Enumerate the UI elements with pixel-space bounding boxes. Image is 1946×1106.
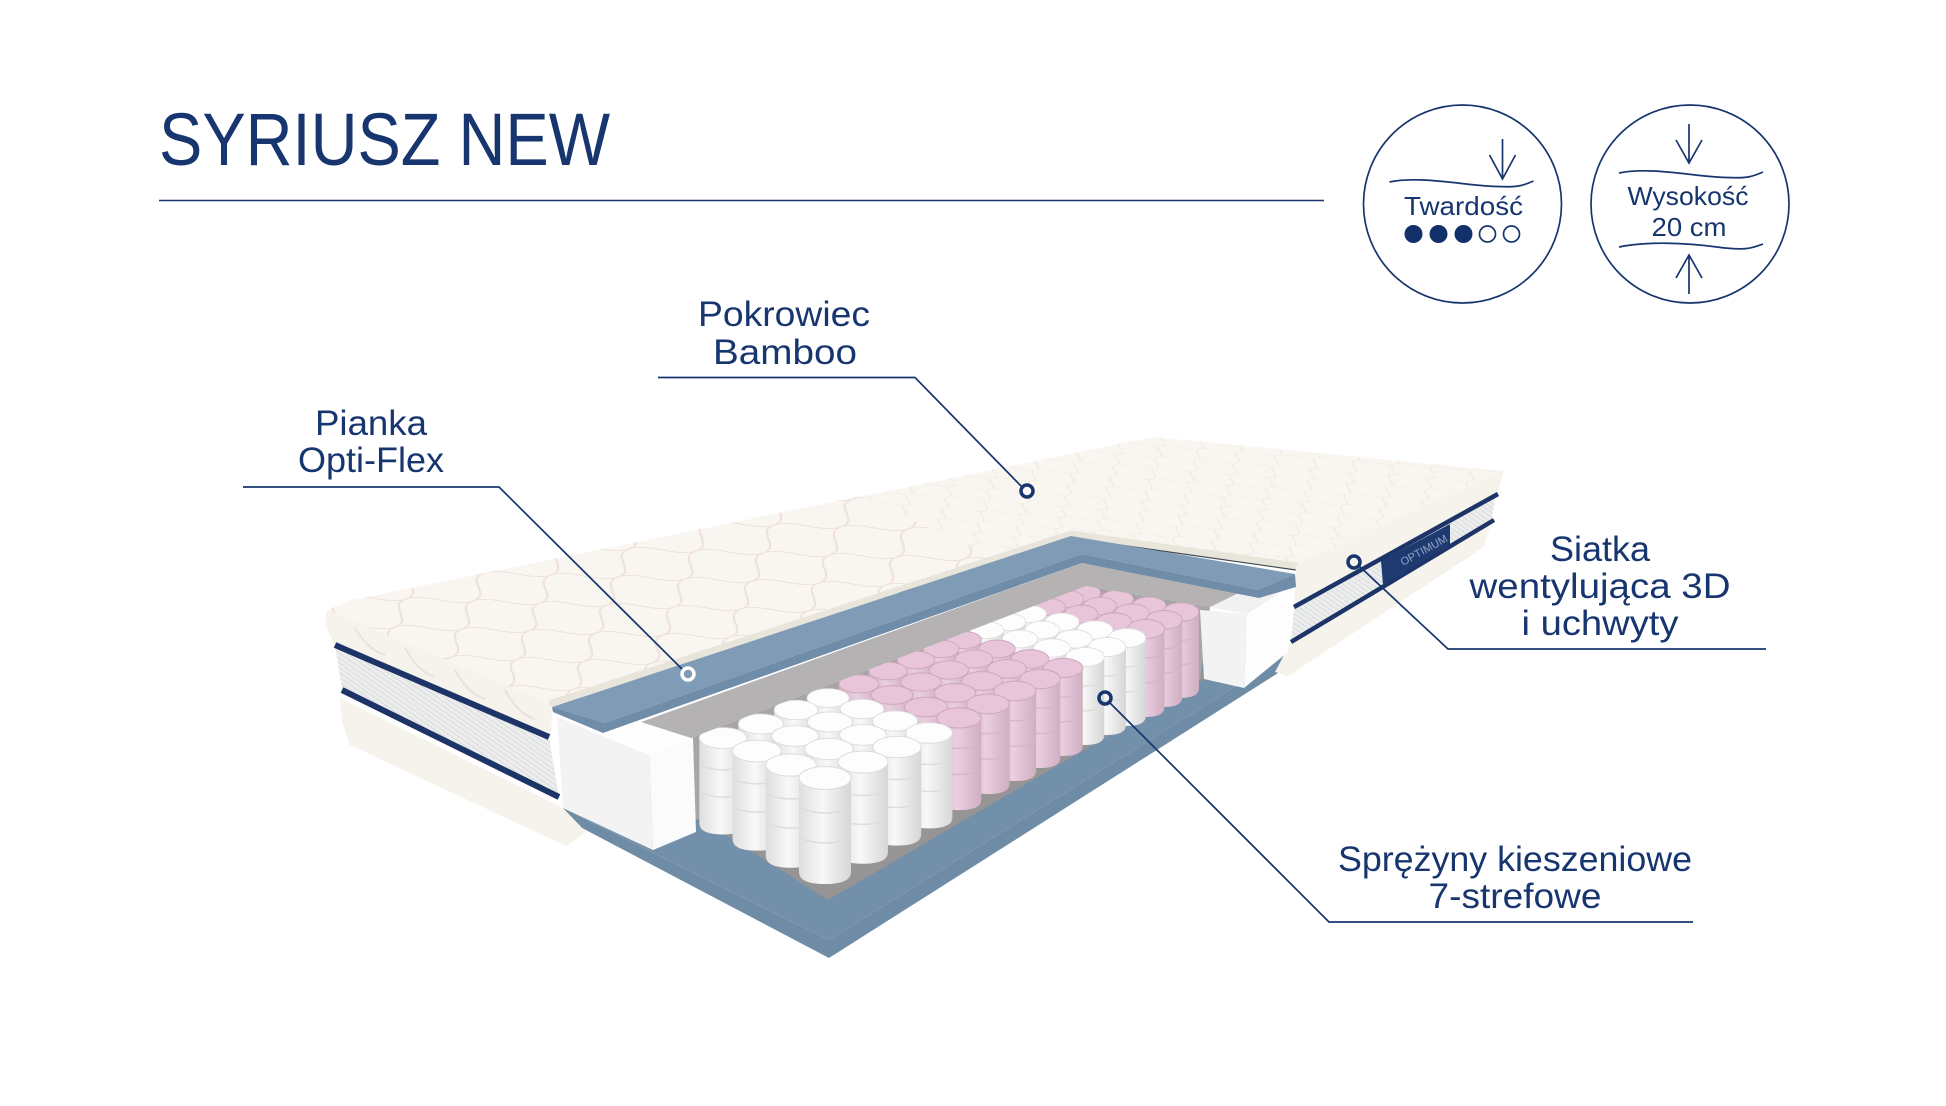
callout: Siatka wentylująca 3D i uchwyty: wentylująca 3D [1468, 567, 1730, 606]
cover: right side [1275, 470, 1504, 676]
top blue foam layer [552, 536, 1296, 733]
brand label: OPTIMUM [1399, 533, 1450, 569]
callout: Siatka wentylująca 3D i uchwyty [1348, 530, 1766, 649]
callout: Sprężyny kieszeniowe 7-strefowe: Sprężyny kieszeniowe [1338, 840, 1692, 879]
bottom grey felt [690, 600, 1210, 900]
bottom blue foam layer [563, 655, 1286, 958]
callout: Sprężyny kieszeniowe 7-strefowe: 7-strefowe [1428, 877, 1602, 916]
icon: height badge: Wysokość [1628, 181, 1748, 211]
callout: Sprężyny kieszeniowe 7-strefowe [1099, 692, 1693, 922]
cover: mesh side left with navy stripes [335, 645, 559, 797]
cover: lower side left [340, 698, 586, 846]
cover: upper side and top [325, 437, 1504, 740]
icon: firmness badge: Twardość [1404, 191, 1523, 221]
mattress illustration [325, 437, 1504, 958]
title: SYRIUSZ NEW [159, 98, 610, 181]
cavity back wall [691, 586, 1210, 820]
callout: Pianka Opti-Flex: Opti-Flex [298, 441, 445, 480]
top grey felt [641, 563, 1239, 738]
white foam block right [1200, 585, 1292, 688]
white foam block left [557, 717, 696, 850]
callout: Siatka wentylująca 3D i uchwyty: i uchwyty [1522, 604, 1679, 643]
callout: Pokrowiec Bamboo [658, 295, 1033, 497]
brand label [1381, 524, 1450, 585]
icon: height badge: 20 cm [1652, 212, 1726, 242]
callout: Pokrowiec Bamboo: Bamboo [713, 333, 857, 372]
icon: firmness badge [1364, 105, 1562, 303]
icon: height badge [1591, 105, 1789, 303]
callout: Pianka Opti-Flex [243, 404, 694, 680]
pocket springs [699, 585, 1199, 884]
callout: Siatka wentylująca 3D i uchwyty: Siatka [1550, 530, 1651, 569]
callout: Pokrowiec Bamboo: Pokrowiec [698, 295, 870, 334]
callout: Pianka Opti-Flex: Pianka [315, 404, 428, 443]
